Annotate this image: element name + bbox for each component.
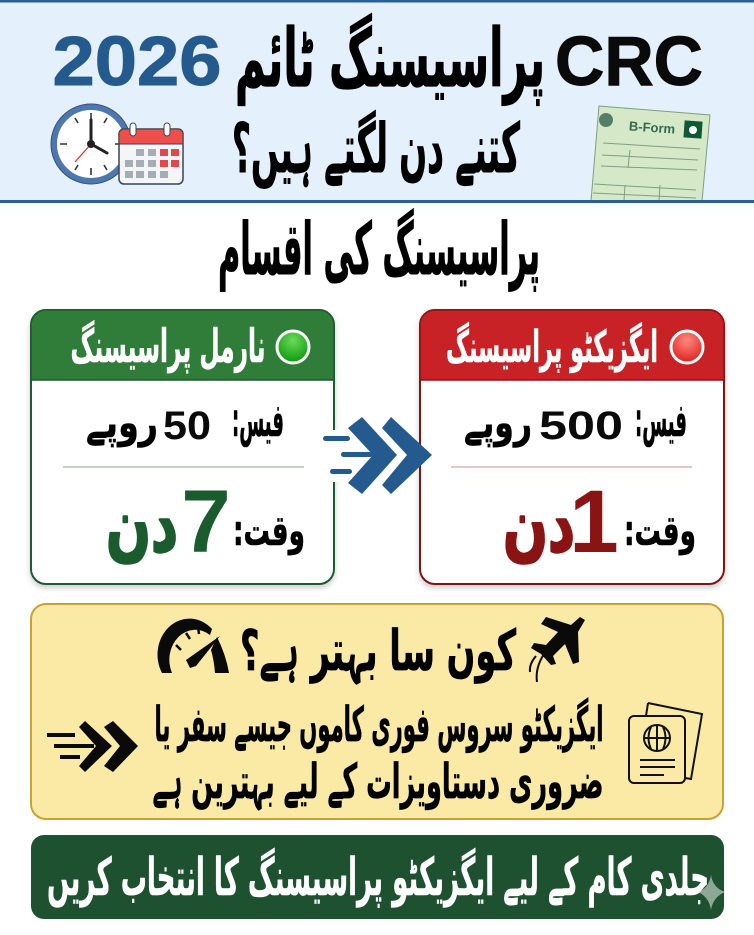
time label: وقت: <box>624 506 696 556</box>
fee amount: 500 <box>539 404 623 448</box>
panel: normal processing <box>31 310 334 584</box>
card heading: نارمل پراسیسنگ <box>70 319 266 374</box>
icon: clock <box>51 104 131 184</box>
icon: red dot <box>671 331 703 363</box>
time number: 1 <box>569 471 619 571</box>
icon: airplane <box>530 617 585 682</box>
panel: which is better <box>31 604 723 819</box>
icon: fast arrow <box>47 721 138 772</box>
time label: وقت: <box>233 506 305 556</box>
icon: speedometer <box>158 619 229 673</box>
title: year: 2026 <box>52 22 222 100</box>
fee unit: روپے <box>86 398 158 448</box>
time unit: دن <box>106 480 178 569</box>
fee unit: روپے <box>464 398 532 448</box>
panel: normal processing: فیس: <box>232 393 284 447</box>
icon: calendar <box>119 123 183 184</box>
icon: B-Form document: B-Form <box>628 118 676 137</box>
heading: کون سا بہتر ہے؟ <box>240 619 516 685</box>
panel: header <box>0 0 754 203</box>
banner: call to action <box>31 835 725 919</box>
time number: 7 <box>181 471 231 571</box>
icon: sparkle <box>698 875 725 910</box>
icon: green dot <box>277 331 309 363</box>
arrow: normal to executive <box>323 417 432 494</box>
icon: B-Form document <box>591 106 710 201</box>
icon: passport <box>629 703 702 783</box>
panel: executive processing <box>420 310 724 584</box>
fee amount: 50 <box>163 404 211 448</box>
title: CRC: CRC <box>555 22 703 100</box>
time unit: دن <box>503 480 575 569</box>
